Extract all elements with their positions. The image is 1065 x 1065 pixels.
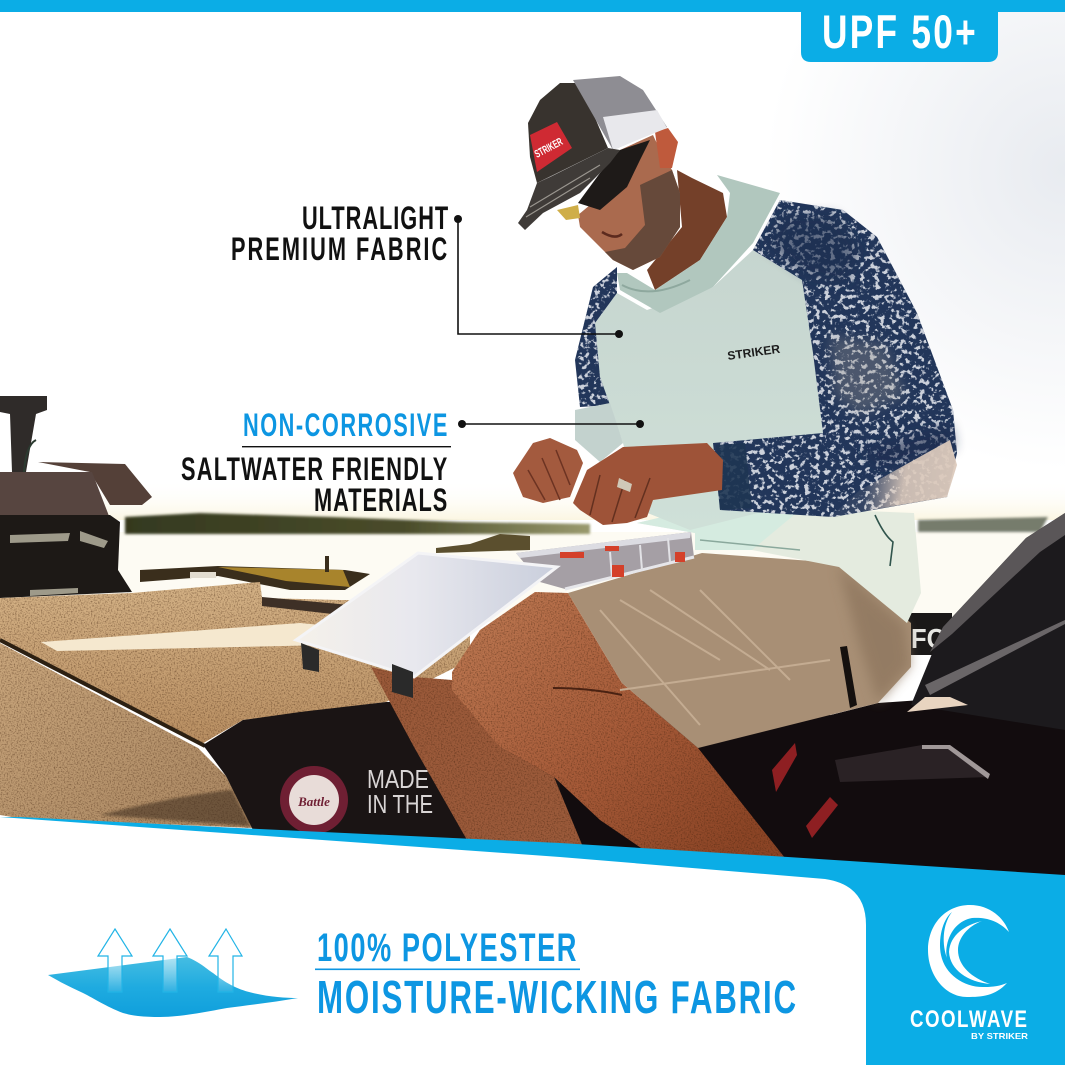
background boat console: [0, 396, 152, 598]
hood drawcord: [622, 280, 690, 291]
head and face: [578, 128, 680, 270]
wave mark: [928, 905, 1009, 997]
beard: [605, 170, 680, 270]
hull lettering: IN THE: [367, 789, 433, 819]
treeline: [125, 513, 1048, 534]
knee crease: [553, 688, 622, 695]
hull lettering: MADE: [367, 764, 429, 794]
FC sign: FC: [911, 623, 945, 654]
shorts: [568, 553, 911, 748]
icon: moisture-wicking fabric: [48, 929, 298, 1017]
red cords: [772, 743, 838, 838]
lures on deck: [436, 534, 530, 553]
heading: moisture-wicking text: [315, 926, 796, 1024]
neck: [647, 170, 727, 290]
deck: [0, 582, 470, 745]
callout: non-corrosive: MATERIALS: [314, 482, 447, 518]
right sleeve camo: [713, 200, 957, 517]
callout: non-corrosive: SALTWATER FRIENDLY: [181, 451, 447, 487]
left hand: [513, 438, 583, 503]
logo: Coolwave by Striker: [910, 905, 1028, 1041]
sunglasses: [557, 140, 650, 220]
fabric sheet: [48, 957, 298, 1017]
water: [0, 532, 1065, 622]
trucker cap: [518, 76, 667, 230]
callout: ultralight premium fabric: [231, 200, 623, 338]
faded cuff: [830, 440, 957, 517]
shirt logo: STRIKER: [726, 342, 781, 363]
arrows: [98, 929, 242, 992]
ring: [617, 478, 632, 492]
heading: moisture-wicking text: MOISTURE-WICKING FABRIC: [317, 972, 796, 1024]
hood: [617, 175, 780, 313]
heading: moisture-wicking text: 100% POLYESTER: [317, 926, 576, 970]
dark strip behind deck: [262, 597, 350, 616]
callout: non-corrosive: NON-CORROSIVE: [243, 407, 447, 443]
FC sign: [908, 613, 952, 655]
cap patch: [530, 122, 572, 172]
callout: ultralight premium fabric: ULTRALIGHT: [302, 200, 448, 236]
bottom wave panel: [0, 817, 1065, 1065]
shirt torso: [595, 250, 826, 530]
callout leader line: [462, 423, 640, 425]
dark hull: [203, 700, 830, 870]
photo scene: boat deck and water: [0, 396, 1065, 880]
shirt hem: [637, 505, 921, 623]
top band and UPF tab: [0, 0, 1065, 62]
hull lettering: [367, 764, 433, 819]
front leg: [452, 592, 785, 858]
deck white strip: [41, 623, 340, 651]
top band and UPF tab: UPF 50+: [822, 5, 976, 58]
tray: [516, 532, 694, 589]
callout: ultralight premium fabric: PREMIUM FABRIC: [231, 231, 447, 267]
mouth: [602, 232, 622, 237]
logo: Coolwave by Striker: BY STRIKER: [971, 1031, 1028, 1041]
rear leg: [371, 667, 583, 847]
shorts pocket: [840, 646, 857, 708]
ear: [655, 128, 678, 168]
callout leader line: [458, 219, 619, 334]
angler figure: [371, 76, 957, 858]
hull badge: Battle: [297, 794, 330, 809]
outboard motor: [835, 513, 1065, 782]
right hand: [573, 443, 723, 525]
hull badge: [280, 766, 348, 834]
dark foreground right: [560, 690, 1065, 880]
deck seam: [0, 640, 205, 746]
tackle box: [296, 532, 694, 698]
logo: Coolwave by Striker: COOLWAVE: [910, 1006, 1027, 1033]
callout: non-corrosive: [181, 407, 644, 518]
clear lid: [296, 553, 557, 677]
distant yellow boat: [140, 556, 370, 590]
sky background: [0, 0, 1065, 820]
hinges: [301, 643, 319, 672]
deck front slab: [0, 643, 253, 828]
left sleeve: [575, 267, 617, 407]
cap patch: STRIKER: [533, 136, 565, 161]
